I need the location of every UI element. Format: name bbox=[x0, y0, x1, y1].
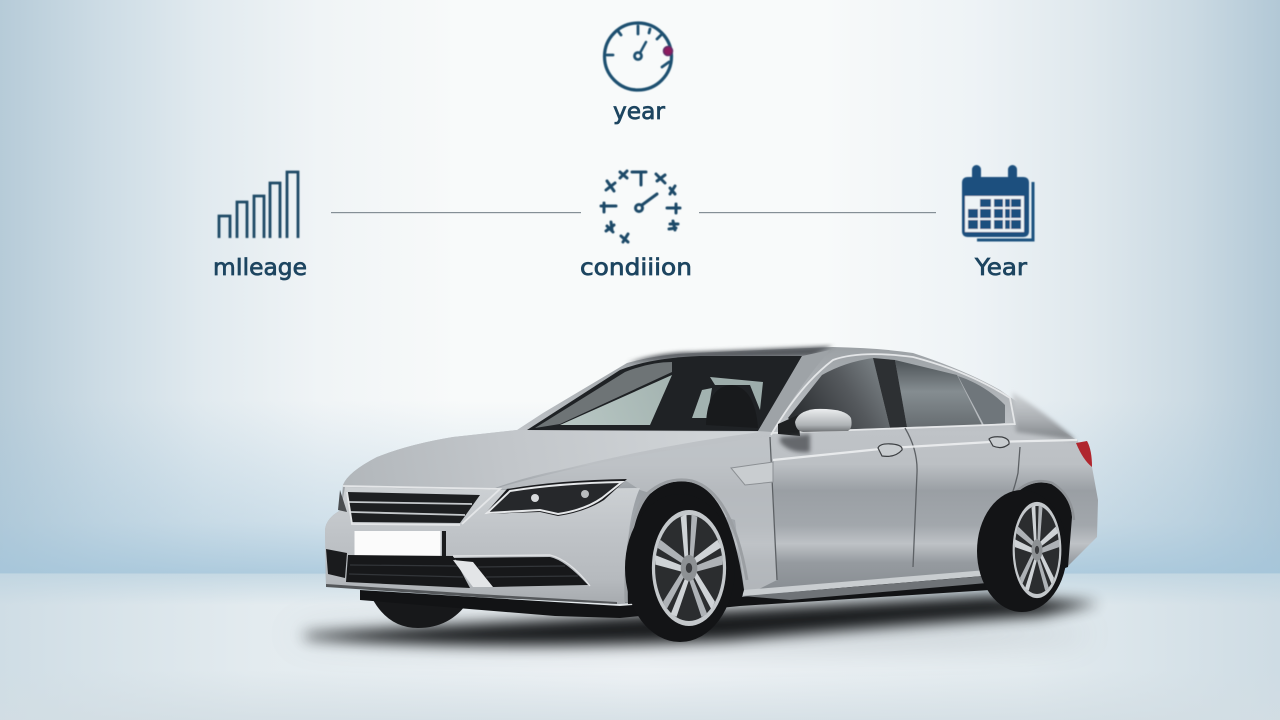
rear side window bbox=[895, 360, 982, 427]
character line bbox=[773, 440, 1077, 460]
car floor shadow bbox=[290, 595, 1100, 646]
front bumper bbox=[325, 487, 640, 604]
windshield small glass bbox=[692, 388, 712, 418]
A-pillar bbox=[758, 350, 830, 432]
under-body dark bbox=[360, 574, 990, 618]
grille bbox=[343, 486, 500, 525]
headlight bbox=[485, 479, 627, 516]
front wheel arch bbox=[628, 481, 744, 604]
label: mileage: mIleage bbox=[213, 253, 307, 281]
rear deck bbox=[1012, 392, 1076, 440]
label: year (top): year bbox=[613, 97, 665, 125]
pillar bbox=[873, 358, 907, 428]
fender vent bbox=[731, 462, 773, 485]
door shut lines bbox=[770, 428, 1020, 580]
label: Year: Year bbox=[974, 253, 1027, 281]
icon: condition dial bbox=[601, 171, 680, 242]
horizon glow bbox=[0, 400, 1280, 574]
fender bbox=[490, 436, 777, 596]
connector line left bbox=[331, 212, 581, 213]
tail lamp bbox=[1076, 441, 1092, 467]
licence plate bbox=[354, 531, 446, 557]
front wheel bbox=[625, 494, 735, 642]
floor bbox=[0, 573, 1280, 720]
windshield rear glass bbox=[710, 377, 763, 410]
window chrome bbox=[771, 354, 1015, 435]
right air intake bbox=[453, 555, 590, 587]
car bbox=[290, 346, 1100, 646]
side marker bbox=[338, 490, 347, 512]
mirror bbox=[778, 409, 852, 452]
car body bbox=[325, 347, 1098, 604]
rear wheel bbox=[977, 490, 1067, 612]
connector line right bbox=[699, 212, 936, 213]
windshield frame bbox=[527, 356, 802, 431]
label: condition: condiiion bbox=[580, 253, 692, 281]
top icon: gauge bbox=[604, 23, 672, 90]
roof shadow bbox=[627, 346, 833, 363]
icon: mileage bars bbox=[219, 172, 298, 238]
seat bbox=[706, 385, 758, 428]
windshield left glare bbox=[535, 362, 672, 428]
sill bbox=[743, 570, 987, 596]
door handles bbox=[878, 437, 1009, 456]
bumper lip bbox=[326, 584, 617, 604]
quarter window bbox=[958, 376, 1005, 425]
front under-car tyre bbox=[372, 598, 468, 628]
windshield glass bbox=[560, 375, 672, 425]
lower grille bbox=[346, 555, 470, 588]
hood bbox=[343, 430, 760, 490]
background wall bbox=[0, 0, 1280, 575]
rear wheel arch bbox=[993, 483, 1072, 580]
front side window bbox=[788, 358, 890, 431]
icon: calendar bbox=[962, 165, 1033, 240]
left air intake bbox=[326, 549, 347, 578]
